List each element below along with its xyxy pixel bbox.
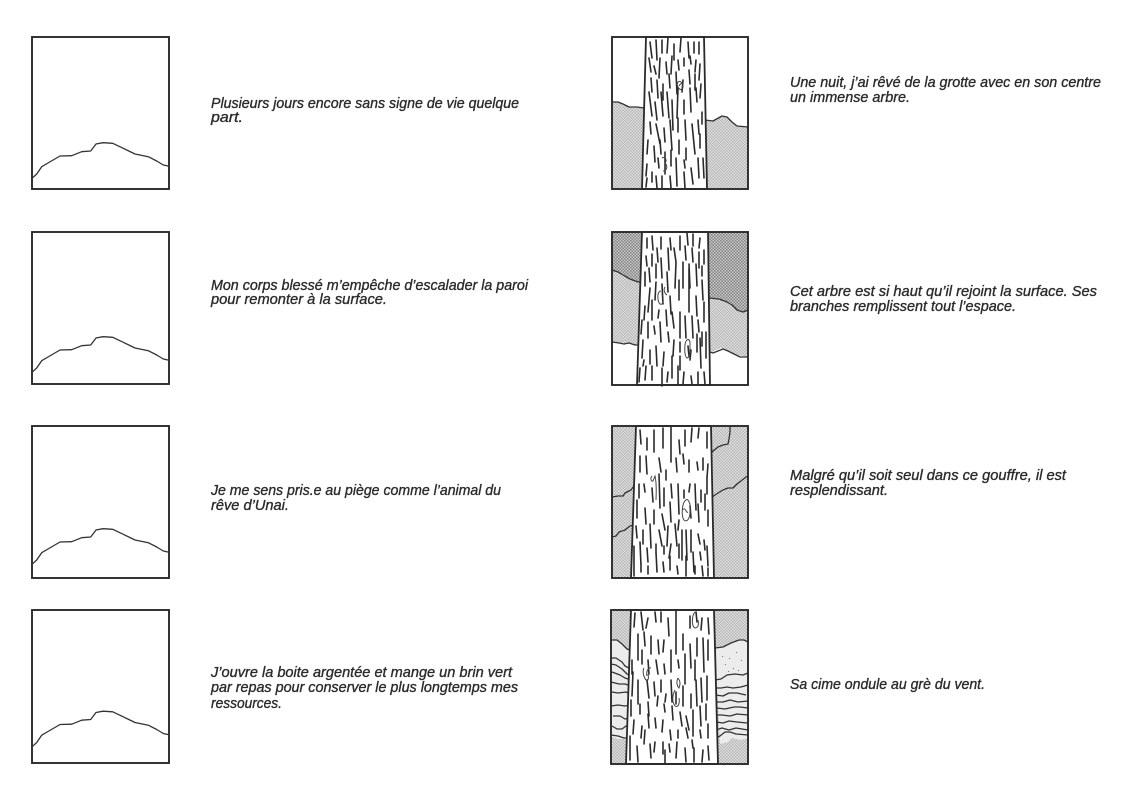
- caption: pour remonter à la surface.: [210, 291, 387, 308]
- caption: Sa cime ondule au grè du vent.: [790, 676, 985, 693]
- caption: [790, 283, 1097, 315]
- panel: right row 4: [611, 610, 985, 764]
- caption: [210, 95, 519, 126]
- caption: Une nuit, j’ai rêvé de la grotte avec en son centre: [790, 74, 1101, 91]
- frame with ridge line: [32, 426, 169, 578]
- caption: resplendissant.: [790, 482, 888, 499]
- caption: Je me sens pris.e au piège comme l’animal du: [210, 482, 502, 499]
- frame with ridge line: [32, 610, 169, 763]
- frame with ridge line: [32, 37, 169, 189]
- caption: [790, 74, 1101, 106]
- tree in cave illustration: [612, 232, 748, 386]
- caption: rêve d’Unai.: [211, 497, 289, 514]
- caption: Plusieurs jours encore sans signe de vie quelque: [211, 95, 519, 112]
- caption: [790, 467, 1067, 499]
- caption: Malgré qu’il soit seul dans ce gouffre, il est: [790, 467, 1067, 484]
- caption: Mon corps blessé m’empêche d’escalader la paroi: [211, 277, 529, 294]
- tree in cave illustration: [612, 37, 748, 189]
- tree in cave illustration: [611, 610, 749, 764]
- panel: left row 1: [32, 37, 519, 189]
- panel: right row 1: [612, 37, 1101, 189]
- caption: branches remplissent tout l’espace.: [790, 298, 1016, 315]
- caption: J’ouvre la boite argentée et mange un brin vert: [210, 664, 513, 681]
- frame with ridge line: [32, 232, 169, 384]
- tree in cave illustration: [612, 426, 748, 578]
- panel: left row 3: [32, 426, 502, 578]
- caption: [210, 664, 518, 712]
- caption: ressources.: [211, 695, 282, 712]
- panel: right row 3: [612, 426, 1067, 578]
- caption: par repas pour conserver le plus longtemps mes: [210, 679, 518, 696]
- caption: [210, 482, 502, 514]
- caption: Cet arbre est si haut qu’il rejoint la surface. Ses: [790, 283, 1097, 300]
- panel: left row 4: [32, 610, 518, 763]
- caption: [210, 277, 529, 308]
- caption: un immense arbre.: [790, 89, 910, 106]
- panel: left row 2: [32, 232, 529, 384]
- panel: right row 2: [612, 232, 1097, 386]
- caption: part.: [210, 109, 243, 126]
